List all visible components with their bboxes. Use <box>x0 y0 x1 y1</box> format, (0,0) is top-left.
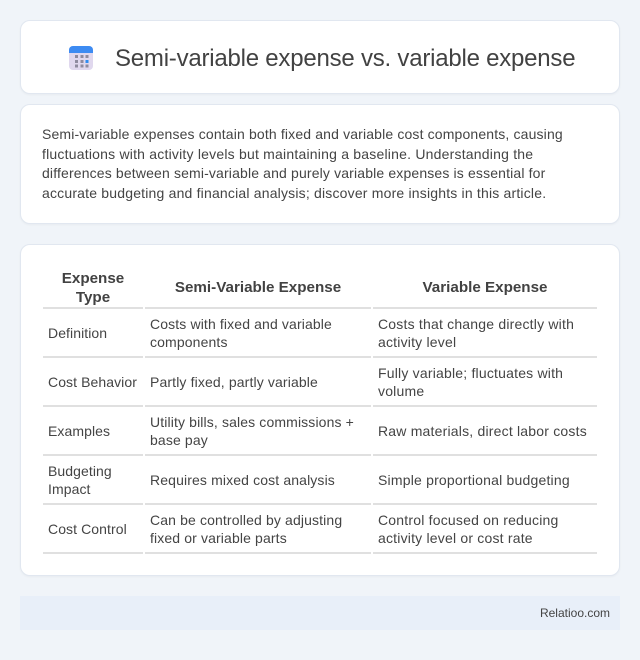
column header: expense type: Expense <box>62 270 124 286</box>
intro paragraph <box>42 126 563 201</box>
row: budgeting impact <box>48 463 570 497</box>
row: definition: components <box>150 334 228 350</box>
row: definition: activity level <box>378 334 456 350</box>
row: budgeting impact: Impact <box>48 481 90 497</box>
row: examples: base pay <box>150 432 208 448</box>
row: cost control: activity level or cost rate <box>378 530 533 546</box>
row: cost behavior: volume <box>378 383 424 399</box>
row: cost behavior <box>48 365 563 399</box>
footer credit: Relatioo.com <box>540 606 610 620</box>
row: definition <box>48 316 574 350</box>
intro text panel <box>20 104 620 224</box>
column header: semi-variable expense: Semi-Variable Expense <box>175 278 341 296</box>
column header: expense type <box>62 270 124 306</box>
header panel <box>20 20 620 94</box>
row: budgeting impact: Requires mixed cost analysis <box>150 472 335 488</box>
row: definition: Costs with fixed and variable <box>150 316 332 332</box>
row: examples <box>48 414 587 448</box>
row: cost behavior: Partly fixed, partly variable <box>150 374 318 390</box>
intro paragraph: Semi-variable expenses contain both fixed and variable cost components, causing <box>42 126 563 142</box>
row: cost control <box>48 512 559 546</box>
title: Semi-variable expense vs. variable expense <box>115 45 575 72</box>
footer bar <box>20 596 620 630</box>
row: examples: Utility bills, sales commissions + <box>150 414 354 430</box>
intro paragraph: accurate budgeting and financial analysis; discover more insights in this article. <box>42 185 546 201</box>
intro paragraph: fluctuations with activity levels but maintaining a baseline. Understanding the <box>42 146 533 162</box>
table <box>43 270 597 554</box>
row: cost behavior: Cost Behavior <box>48 374 137 390</box>
row: cost control: Cost Control <box>48 521 127 537</box>
row: definition: Costs that change directly with <box>378 316 574 332</box>
column header: expense type: Type <box>76 288 110 306</box>
icon: calendar <box>69 46 93 70</box>
column header: variable expense: Variable Expense <box>423 278 547 296</box>
row: cost behavior: Fully variable; fluctuates with <box>378 365 563 381</box>
row: cost control: Control focused on reducing <box>378 512 559 528</box>
row: budgeting impact: Simple proportional budgeting <box>378 472 570 488</box>
row: definition: Definition <box>48 325 107 341</box>
row: cost control: Can be controlled by adjusting <box>150 512 342 528</box>
row: cost control: fixed or variable parts <box>150 530 287 546</box>
row: examples: Examples <box>48 423 110 439</box>
comparison table panel <box>20 244 620 576</box>
row: budgeting impact: Budgeting <box>48 463 112 479</box>
row: examples: Raw materials, direct labor costs <box>378 423 587 439</box>
intro paragraph: differences between semi-variable and purely variable expenses is essential for <box>42 165 545 181</box>
